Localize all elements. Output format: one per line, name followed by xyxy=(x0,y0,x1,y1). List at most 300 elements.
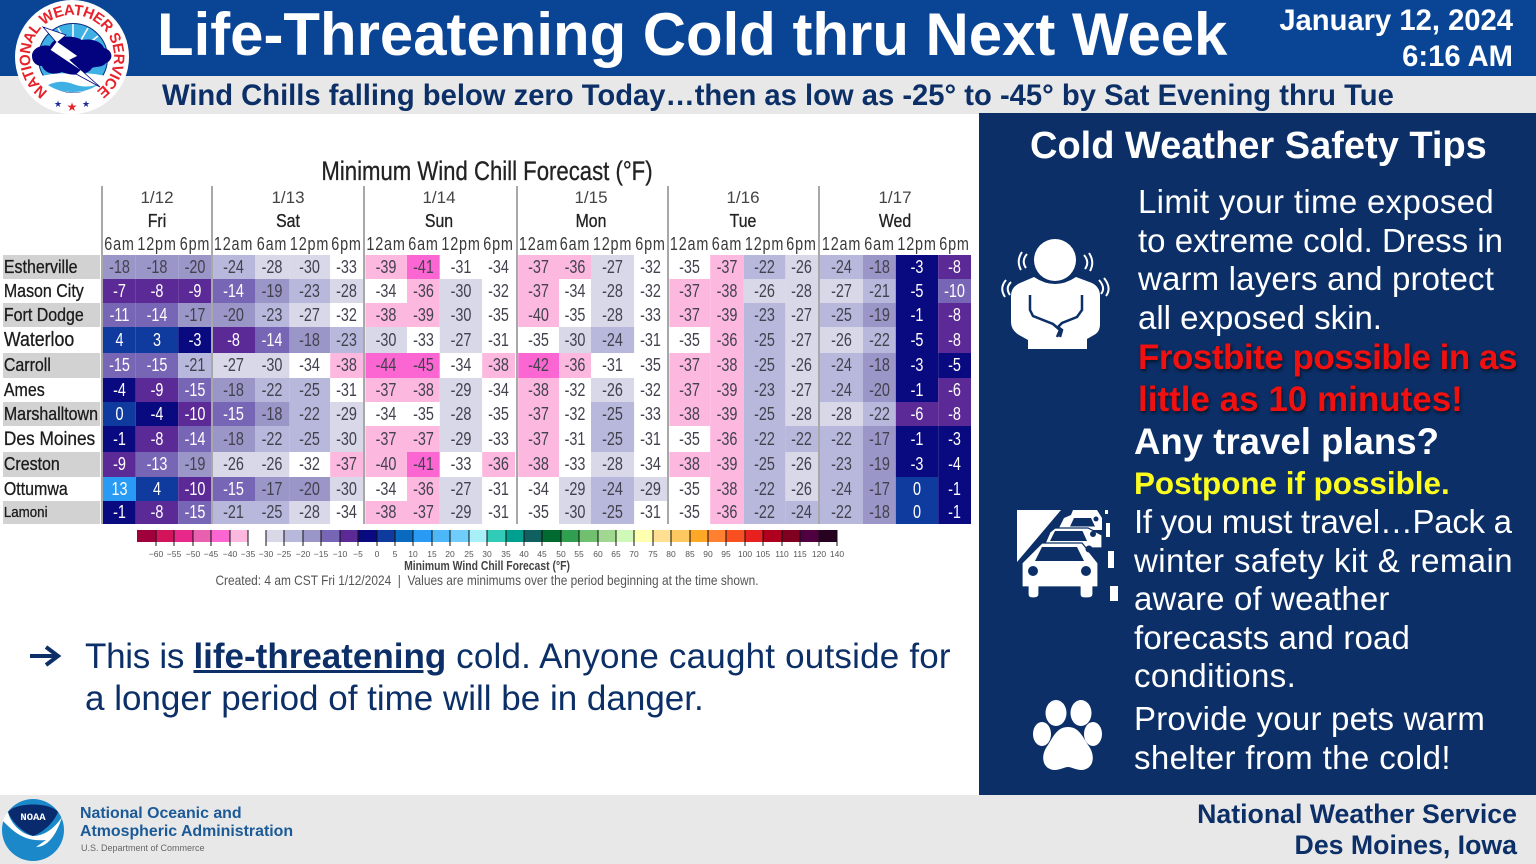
row: Creston: -26 xyxy=(791,454,812,474)
day headers xyxy=(140,188,912,231)
row: Fort Dodge: -14 xyxy=(147,304,167,324)
row: Waterloo: -30 xyxy=(565,330,585,350)
day headers: 1/14 xyxy=(422,188,456,207)
row: Mason City: -26 xyxy=(754,280,775,300)
row: Creston: -13 xyxy=(147,454,167,474)
heading: travel plans: Any travel plans? xyxy=(1134,421,1439,462)
row: Ottumwa: -29 xyxy=(640,478,661,498)
time labels: 12pm xyxy=(290,234,329,254)
row: Creston: -33 xyxy=(565,454,585,474)
row: Estherville: -32 xyxy=(640,256,661,276)
office name: Des Moines, Iowa xyxy=(1295,830,1517,860)
row: Des Moines: -29 xyxy=(451,428,471,448)
row: Ames: -4 xyxy=(113,380,126,400)
row: Waterloo: -31 xyxy=(640,330,661,350)
legend: color scale: 90 xyxy=(703,549,713,559)
row: Waterloo: 4 xyxy=(115,330,124,350)
legend: color scale: 115 xyxy=(793,549,807,559)
tip: travel kit: If you must travel…Pack a xyxy=(1134,503,1512,540)
legend: color scale: 85 xyxy=(685,549,695,559)
row: Estherville: -8 xyxy=(948,256,961,276)
row: Carroll: -34 xyxy=(299,355,320,375)
row: Lamoni: -1 xyxy=(948,502,961,522)
row: Des Moines: -25 xyxy=(602,428,623,448)
row: Fort Dodge: -35 xyxy=(565,304,585,324)
row: Estherville: -30 xyxy=(299,256,320,276)
legend: color scale: −60 xyxy=(149,549,163,559)
legend: color scale: 40 xyxy=(519,549,529,559)
legend: color scale: −5 xyxy=(353,549,363,559)
row: Creston: -9 xyxy=(113,454,126,474)
row: Ames: -9 xyxy=(151,380,163,400)
row: Marshalltown: -10 xyxy=(185,404,205,424)
row: Waterloo: -3 xyxy=(189,330,201,350)
row: Ottumwa: -24 xyxy=(831,478,852,498)
chart footnote: Created: 4 am CST Fri 1/12/2024 | Values are minimums over the period beginning at the time shown. xyxy=(215,572,759,588)
row: Creston: -26 xyxy=(262,454,282,474)
row: Carroll: -21 xyxy=(185,355,205,375)
logo: National Weather Service: ★ xyxy=(54,100,62,110)
day headers: Wed xyxy=(879,211,911,231)
logo: NOAA: NOAA xyxy=(20,812,46,824)
row: Ottumwa xyxy=(103,477,971,501)
row: Estherville: -33 xyxy=(336,256,357,276)
row: Mason City: -7 xyxy=(113,280,126,300)
row: Fort Dodge: -19 xyxy=(869,304,890,324)
row: Estherville: -18 xyxy=(869,256,890,276)
row: Des Moines: -22 xyxy=(831,428,852,448)
time labels: 6pm xyxy=(635,234,666,254)
panel heading: Cold Weather Safety Tips xyxy=(1030,125,1487,167)
row: Ames xyxy=(103,378,971,402)
row: Carroll: -44 xyxy=(376,355,396,375)
day headers: 1/13 xyxy=(271,188,305,207)
row: Des Moines: -31 xyxy=(640,428,661,448)
row: Estherville: -26 xyxy=(791,256,812,276)
row: Ames: -22 xyxy=(262,380,282,400)
row: Ottumwa: -30 xyxy=(336,478,357,498)
row label: Lamoni: Lamoni xyxy=(4,504,48,521)
row: Ottumwa: -36 xyxy=(413,478,434,498)
row label: Estherville: Estherville xyxy=(4,256,78,276)
row: Lamoni: -22 xyxy=(831,502,852,522)
department: U.S. Department of Commerce xyxy=(81,843,205,853)
row: Marshalltown: -35 xyxy=(488,404,509,424)
row label: Carroll xyxy=(3,353,100,378)
row: Mason City: -37 xyxy=(679,280,700,300)
row label: Mason City: Mason City xyxy=(4,280,84,300)
row: Carroll: -30 xyxy=(262,355,282,375)
row: Waterloo: -35 xyxy=(679,330,700,350)
legend: color scale: 20 xyxy=(445,549,455,559)
row label: Fort Dodge: Fort Dodge xyxy=(4,304,84,324)
row: Des Moines: -37 xyxy=(376,428,396,448)
row: Lamoni: -31 xyxy=(488,502,509,522)
row: Estherville: -28 xyxy=(262,256,282,276)
row: Ames: -27 xyxy=(791,380,812,400)
row: Fort Dodge: -23 xyxy=(262,304,282,324)
row: Des Moines: -1 xyxy=(911,428,923,448)
row: Mason City: -38 xyxy=(717,280,737,300)
time labels: 6am xyxy=(257,234,287,254)
row: Estherville: -36 xyxy=(565,256,585,276)
legend: color scale: 65 xyxy=(611,549,621,559)
tip: travel kit xyxy=(1134,503,1513,694)
row: Des Moines: -3 xyxy=(948,428,961,448)
row: Ames: -38 xyxy=(413,380,434,400)
row: Des Moines: -36 xyxy=(717,428,737,448)
row: Lamoni: -22 xyxy=(754,502,775,522)
row: Mason City xyxy=(103,279,971,303)
legend: color scale: 105 xyxy=(756,549,770,559)
row: Fort Dodge: -30 xyxy=(451,304,471,324)
logo: National Weather Service: NATIONAL WEATHER SERVICE xyxy=(20,4,124,99)
row: Ames: -23 xyxy=(754,380,775,400)
legend: color scale: 30 xyxy=(482,549,492,559)
row: Waterloo: -22 xyxy=(869,330,890,350)
row: Estherville: -3 xyxy=(911,256,923,276)
row: Fort Dodge: -20 xyxy=(223,304,244,324)
day headers: 1/15 xyxy=(574,188,608,207)
row: Ames: -1 xyxy=(911,380,923,400)
row: Creston: -41 xyxy=(413,454,434,474)
row: Creston: -33 xyxy=(451,454,471,474)
row label: Creston xyxy=(3,452,100,477)
chart: minimum wind chill forecast table xyxy=(3,156,971,588)
legend title: Minimum Wind Chill Forecast (°F) xyxy=(404,558,570,573)
agency name: Atmospheric Administration xyxy=(80,823,293,840)
row: Des Moines: -31 xyxy=(565,428,585,448)
time labels: 6pm xyxy=(939,234,970,254)
row: Mason City: -5 xyxy=(911,280,923,300)
date and time: January 12, 2024 xyxy=(1279,5,1513,37)
subtitle band xyxy=(0,76,1536,114)
row: Ames: -18 xyxy=(223,380,244,400)
warning: frostbite: Frostbite possible in as xyxy=(1138,338,1517,377)
row: Carroll: -45 xyxy=(413,355,434,375)
row: Creston: -4 xyxy=(948,454,961,474)
row: Marshalltown: -15 xyxy=(223,404,244,424)
row: Mason City: -30 xyxy=(451,280,471,300)
time labels: 12pm xyxy=(897,234,937,254)
row: Estherville: -41 xyxy=(413,256,434,276)
row: Fort Dodge: -38 xyxy=(376,304,396,324)
row: Estherville: -24 xyxy=(223,256,244,276)
row: Mason City: -27 xyxy=(831,280,852,300)
row: Marshalltown: -28 xyxy=(831,404,852,424)
panel: cold weather safety tips xyxy=(979,113,1536,795)
day headers: Fri xyxy=(148,211,166,231)
row: Lamoni: -25 xyxy=(262,502,282,522)
row: Carroll: -25 xyxy=(754,355,775,375)
agency name xyxy=(80,805,293,840)
day headers: Sun xyxy=(425,211,453,231)
row: Des Moines: -18 xyxy=(223,428,244,448)
legend: color scale: −55 xyxy=(167,549,181,559)
legend: color scale: 75 xyxy=(648,549,658,559)
row: Fort Dodge xyxy=(103,303,971,327)
row: Ames: -39 xyxy=(717,380,737,400)
row: Carroll xyxy=(103,353,971,378)
time labels: 6am xyxy=(864,234,895,254)
row: Creston: -38 xyxy=(679,454,700,474)
row: Estherville: -35 xyxy=(679,256,700,276)
row: Fort Dodge: -39 xyxy=(717,304,737,324)
row: Lamoni: -28 xyxy=(299,502,320,522)
row: Carroll: -26 xyxy=(791,355,812,375)
row: Des Moines: -37 xyxy=(413,428,434,448)
row: Mason City: -28 xyxy=(791,280,812,300)
row: Ottumwa: -24 xyxy=(602,478,623,498)
row: Ottumwa: -31 xyxy=(488,478,509,498)
row: Carroll: -37 xyxy=(679,355,700,375)
tip: travel kit: forecasts and road xyxy=(1134,618,1410,656)
time labels: 6am xyxy=(104,234,135,254)
row: Carroll: -18 xyxy=(869,355,890,375)
row: Waterloo: -31 xyxy=(488,330,509,350)
row: Ames: -15 xyxy=(185,380,205,400)
time labels: 6am xyxy=(712,234,742,254)
row: Lamoni: -30 xyxy=(565,502,585,522)
row: Mason City: -14 xyxy=(223,280,244,300)
row: Mason City: -34 xyxy=(565,280,585,300)
header banner xyxy=(0,0,1536,76)
row label: Des Moines: Des Moines xyxy=(4,428,95,450)
row: Des Moines: -22 xyxy=(262,428,282,448)
row: Ottumwa: -20 xyxy=(299,478,320,498)
row: Fort Dodge: -33 xyxy=(640,304,661,324)
tip: pets: shelter from the cold! xyxy=(1134,738,1451,776)
time labels: 12pm xyxy=(441,234,481,254)
row: Fort Dodge: -27 xyxy=(299,304,320,324)
row: Marshalltown: -6 xyxy=(911,404,923,424)
row: Fort Dodge: -35 xyxy=(488,304,509,324)
row: Waterloo: -36 xyxy=(717,330,737,350)
row: Marshalltown: -25 xyxy=(754,404,775,424)
row: Carroll: -35 xyxy=(640,355,661,375)
legend: color scale: 110 xyxy=(775,549,789,559)
row: Carroll: -38 xyxy=(717,355,737,375)
row: Ottumwa: -34 xyxy=(376,478,396,498)
row: Ames: -32 xyxy=(640,380,661,400)
row label: Lamoni xyxy=(3,501,100,524)
time labels: 6pm xyxy=(331,234,362,254)
legend: color scale: −45 xyxy=(204,549,218,559)
row: Mason City: -10 xyxy=(944,280,965,300)
legend: color scale: 120 xyxy=(812,549,826,559)
time labels: 6pm xyxy=(786,234,817,254)
row: Ames: -38 xyxy=(528,380,549,400)
title: Life-Threatening Cold thru Next Week xyxy=(157,1,1227,68)
row: Ames: -20 xyxy=(869,380,890,400)
row: Des Moines: -14 xyxy=(185,428,205,448)
row: Mason City: -8 xyxy=(151,280,163,300)
date and time xyxy=(1279,5,1513,73)
row: Creston xyxy=(103,452,971,477)
icon: arrow bullet xyxy=(30,645,62,667)
row: Creston: -40 xyxy=(376,454,396,474)
row: Ottumwa: -22 xyxy=(754,478,775,498)
row: Lamoni: -21 xyxy=(223,502,244,522)
legend: color scale: −15 xyxy=(314,549,328,559)
row: Waterloo: 3 xyxy=(153,330,161,350)
row: Marshalltown: -28 xyxy=(791,404,812,424)
row: Ames: -26 xyxy=(602,380,623,400)
row: Lamoni: -25 xyxy=(602,502,623,522)
row: Lamoni: -1 xyxy=(113,502,126,522)
row: Creston: -37 xyxy=(336,454,357,474)
tip: travel kit: conditions. xyxy=(1134,657,1296,694)
row: Waterloo: -24 xyxy=(602,330,623,350)
row: Ottumwa: -17 xyxy=(869,478,890,498)
row: Marshalltown: -22 xyxy=(299,404,320,424)
row: Waterloo: -18 xyxy=(299,330,320,350)
row label: Waterloo: Waterloo xyxy=(4,328,74,350)
row label: Estherville xyxy=(3,255,100,279)
row: Lamoni: -34 xyxy=(336,502,357,522)
row: Waterloo: -27 xyxy=(791,330,812,350)
tip: limit exposure: Limit your time exposed xyxy=(1138,183,1494,220)
row: Waterloo: -33 xyxy=(413,330,434,350)
legend: color scale: −50 xyxy=(186,549,200,559)
row: Waterloo: -23 xyxy=(336,330,357,350)
legend: color scale: 35 xyxy=(501,549,511,559)
row: Fort Dodge: -39 xyxy=(413,304,434,324)
time labels: 12am xyxy=(519,234,558,254)
row: Ames: -25 xyxy=(299,380,320,400)
legend: color scale: −30 xyxy=(259,549,273,559)
row: Ottumwa: -29 xyxy=(565,478,585,498)
time labels: 6am xyxy=(560,234,590,254)
row: Marshalltown: 0 xyxy=(115,404,124,424)
row: Carroll: -5 xyxy=(948,355,961,375)
row label: Fort Dodge xyxy=(3,303,100,327)
time labels xyxy=(104,234,970,254)
row: Ames: -29 xyxy=(451,380,471,400)
row: Mason City: -34 xyxy=(376,280,396,300)
row: Mason City: -32 xyxy=(640,280,661,300)
row label: Ames: Ames xyxy=(4,380,45,400)
legend: color scale: 100 xyxy=(738,549,752,559)
row: Des Moines: -17 xyxy=(869,428,890,448)
subtitle: Wind Chills falling below zero Today…then as low as -25° to -45° by Sat Evening thru Tue xyxy=(162,80,1394,112)
time labels: 12am xyxy=(822,234,861,254)
time labels: 12pm xyxy=(745,234,784,254)
row: Des Moines: -37 xyxy=(528,428,549,448)
row: Creston: -32 xyxy=(299,454,320,474)
row: Marshalltown: -25 xyxy=(602,404,623,424)
row: Estherville: -27 xyxy=(602,256,623,276)
row: Carroll: -42 xyxy=(528,355,549,375)
row: Fort Dodge: -40 xyxy=(528,304,549,324)
icon: paw print xyxy=(1033,700,1102,770)
row: Ottumwa: -34 xyxy=(528,478,549,498)
time labels: 12pm xyxy=(137,234,177,254)
day headers: 1/17 xyxy=(878,188,912,207)
row: Des Moines: -30 xyxy=(336,428,357,448)
row: Ottumwa: -27 xyxy=(451,478,471,498)
row: Estherville: -24 xyxy=(831,256,852,276)
row: Lamoni: -38 xyxy=(376,502,396,522)
day headers: Tue xyxy=(730,211,756,231)
row: Des Moines: -8 xyxy=(151,428,163,448)
legend: color scale: 55 xyxy=(574,549,584,559)
row: Marshalltown: -4 xyxy=(151,404,163,424)
legend: color scale: 0 xyxy=(375,549,380,559)
row: Creston: -3 xyxy=(911,454,923,474)
row: Mason City: -28 xyxy=(602,280,623,300)
logo: NOAA xyxy=(2,799,64,861)
row: Mason City: -21 xyxy=(869,280,890,300)
legend: color scale: −40 xyxy=(223,549,237,559)
row: Marshalltown: -38 xyxy=(679,404,700,424)
chart title: Minimum Wind Chill Forecast (°F) xyxy=(321,156,653,186)
day headers: 1/16 xyxy=(726,188,760,207)
row: Waterloo: -14 xyxy=(262,330,282,350)
row: Waterloo: -26 xyxy=(831,330,852,350)
row: Ottumwa: 0 xyxy=(913,478,921,498)
callout: life-threatening cold xyxy=(30,637,951,718)
day headers: Sat xyxy=(276,211,300,231)
row: Estherville: -31 xyxy=(451,256,471,276)
time labels: 12pm xyxy=(593,234,632,254)
tip: pets: Provide your pets warm xyxy=(1134,700,1485,737)
legend: color scale: 45 xyxy=(537,549,547,559)
row: Marshalltown: -32 xyxy=(565,404,585,424)
legend: color scale: 70 xyxy=(629,549,639,559)
row: Waterloo: -8 xyxy=(948,330,961,350)
row: Fort Dodge: -25 xyxy=(831,304,852,324)
row: Des Moines: -25 xyxy=(299,428,320,448)
row label: Creston: Creston xyxy=(4,454,60,474)
row: Fort Dodge: -28 xyxy=(602,304,623,324)
legend: color scale: 10 xyxy=(408,549,418,559)
row: Waterloo: -30 xyxy=(376,330,396,350)
row: Fort Dodge: -32 xyxy=(336,304,357,324)
row: Ames: -34 xyxy=(488,380,509,400)
row: Lamoni: -37 xyxy=(413,502,434,522)
row: Marshalltown: -39 xyxy=(717,404,737,424)
tip: pets xyxy=(1134,700,1485,776)
row: Des Moines: -1 xyxy=(113,428,126,448)
legend: color scale: 140 xyxy=(830,549,844,559)
date and time: 6:16 AM xyxy=(1402,41,1513,73)
row: Carroll: -24 xyxy=(831,355,852,375)
row: Lamoni: -18 xyxy=(869,502,890,522)
legend: color scale xyxy=(137,530,844,559)
row: Ottumwa: -26 xyxy=(791,478,812,498)
row: Ottumwa: -10 xyxy=(185,478,205,498)
row: Creston: -39 xyxy=(717,454,737,474)
row: Fort Dodge: -17 xyxy=(185,304,205,324)
row: Estherville: -20 xyxy=(185,256,205,276)
row: Ames: -6 xyxy=(948,380,961,400)
row: Mason City: -28 xyxy=(336,280,357,300)
tip: limit exposure: all exposed skin. xyxy=(1138,298,1382,336)
row: Lamoni: -24 xyxy=(791,502,812,522)
row: Lamoni: -8 xyxy=(151,502,163,522)
row: Lamoni: -31 xyxy=(640,502,661,522)
row: Waterloo: -25 xyxy=(754,330,775,350)
row: Ames: -31 xyxy=(336,380,357,400)
tip: limit exposure: to extreme cold. Dress in xyxy=(1138,222,1503,258)
row label: Marshalltown: Marshalltown xyxy=(4,404,98,424)
legend: color scale: −10 xyxy=(333,549,347,559)
warning: frostbite: little as 10 minutes! xyxy=(1138,380,1463,419)
row: Creston: -34 xyxy=(640,454,661,474)
row: Fort Dodge: -1 xyxy=(911,304,923,324)
row: Creston: -38 xyxy=(528,454,549,474)
